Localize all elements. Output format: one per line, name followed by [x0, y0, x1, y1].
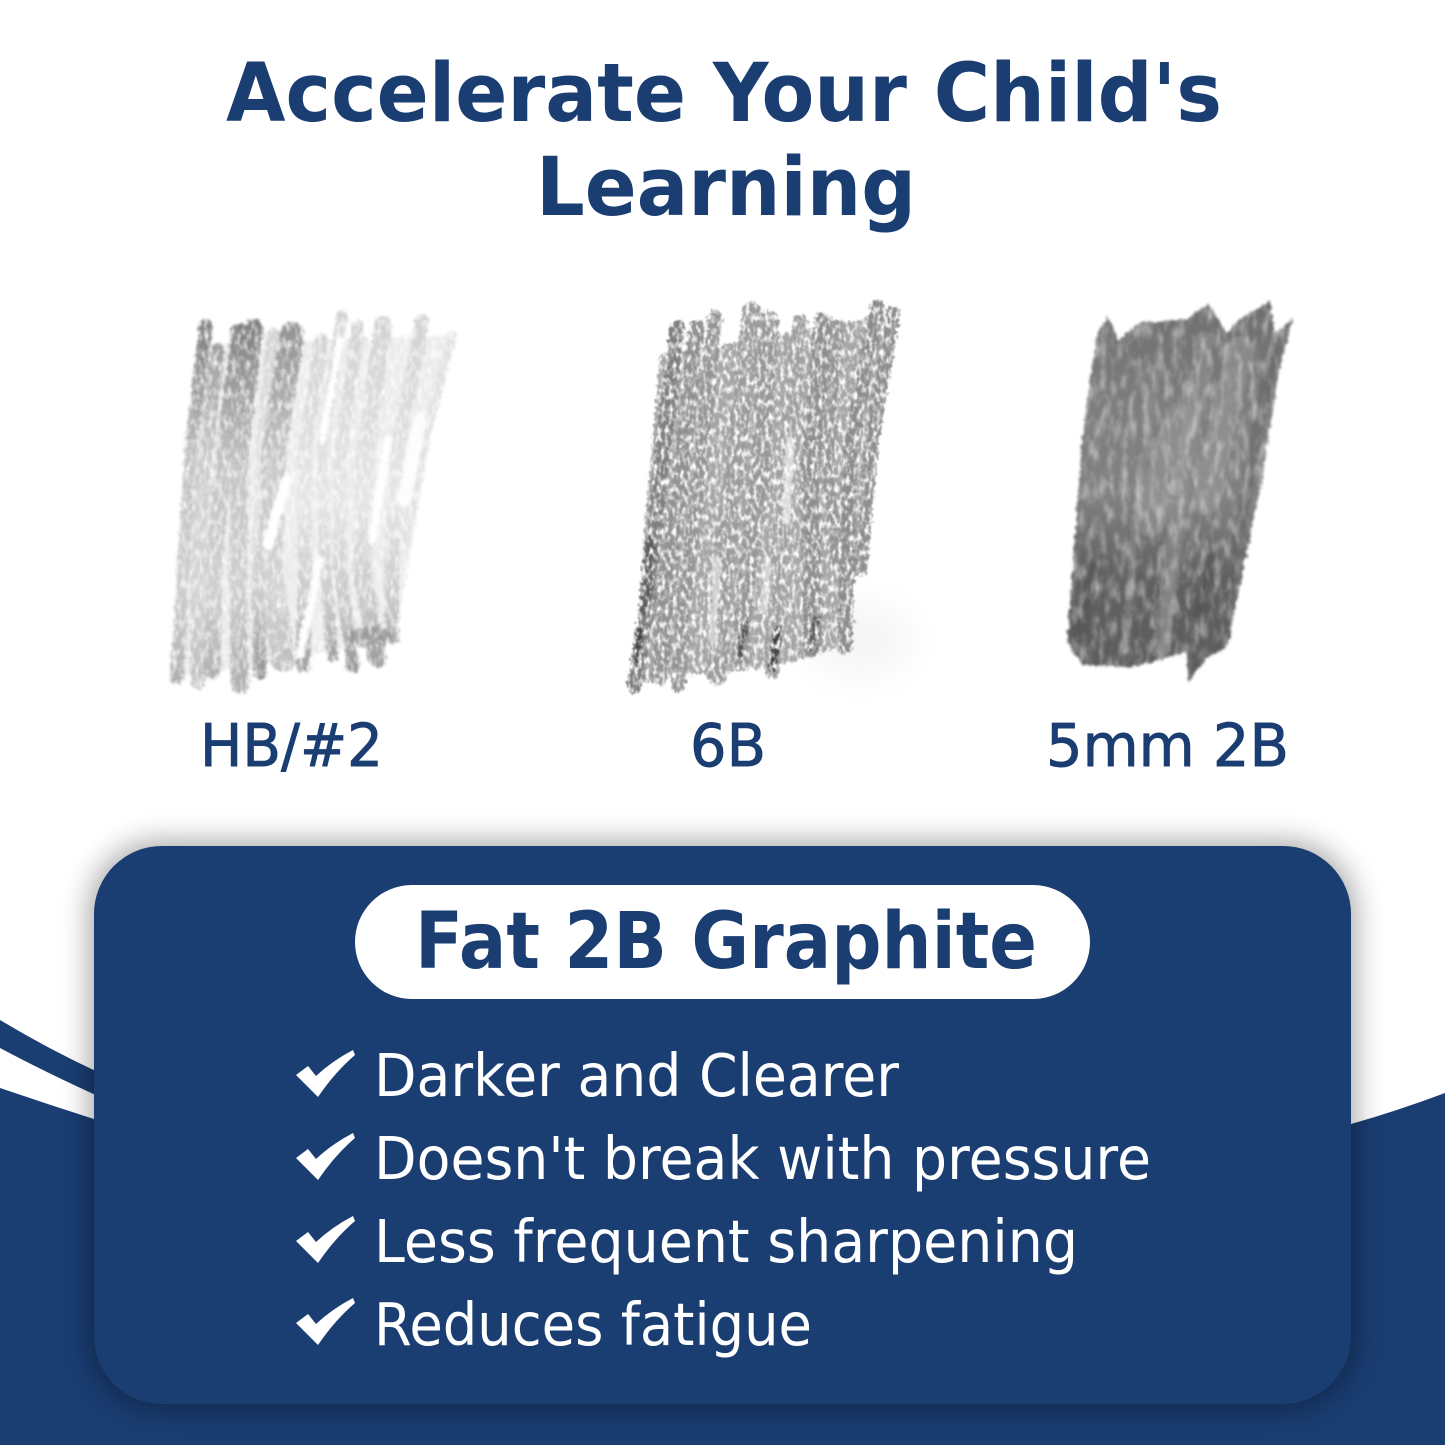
swatch labels: 5mm 2B	[1046, 711, 1289, 780]
swatch labels: 6B	[690, 711, 766, 780]
smudge shadow	[808, 604, 912, 676]
list item: reduces fatigue: Reduces fatigue	[374, 1290, 812, 1359]
title: Accelerate Your Child's	[226, 47, 1222, 141]
graphite swatch: 6B	[634, 307, 912, 686]
graphite swatch: HB/#2	[177, 316, 452, 685]
wave: bottom navy area	[0, 1088, 1445, 1445]
wave: thin upper band	[0, 1020, 100, 1097]
list item: less sharpening: Less frequent sharpening	[374, 1207, 1078, 1276]
list item: darker and clearer: Darker and Clearer	[374, 1041, 900, 1110]
title	[226, 47, 1222, 235]
heading: Fat 2B Graphite: Fat 2B Graphite	[415, 897, 1037, 987]
list item: doesn't break: Doesn't break with pressure	[374, 1124, 1151, 1193]
pill: heading background	[355, 885, 1090, 999]
swatch labels: HB/#2	[200, 711, 383, 780]
panel shadow	[90, 842, 1355, 1408]
graphite swatch: 5mm 2B	[1067, 301, 1293, 683]
title: Learning	[536, 141, 916, 235]
swatch labels	[200, 711, 1289, 780]
panel: fat 2B graphite	[94, 846, 1351, 1404]
